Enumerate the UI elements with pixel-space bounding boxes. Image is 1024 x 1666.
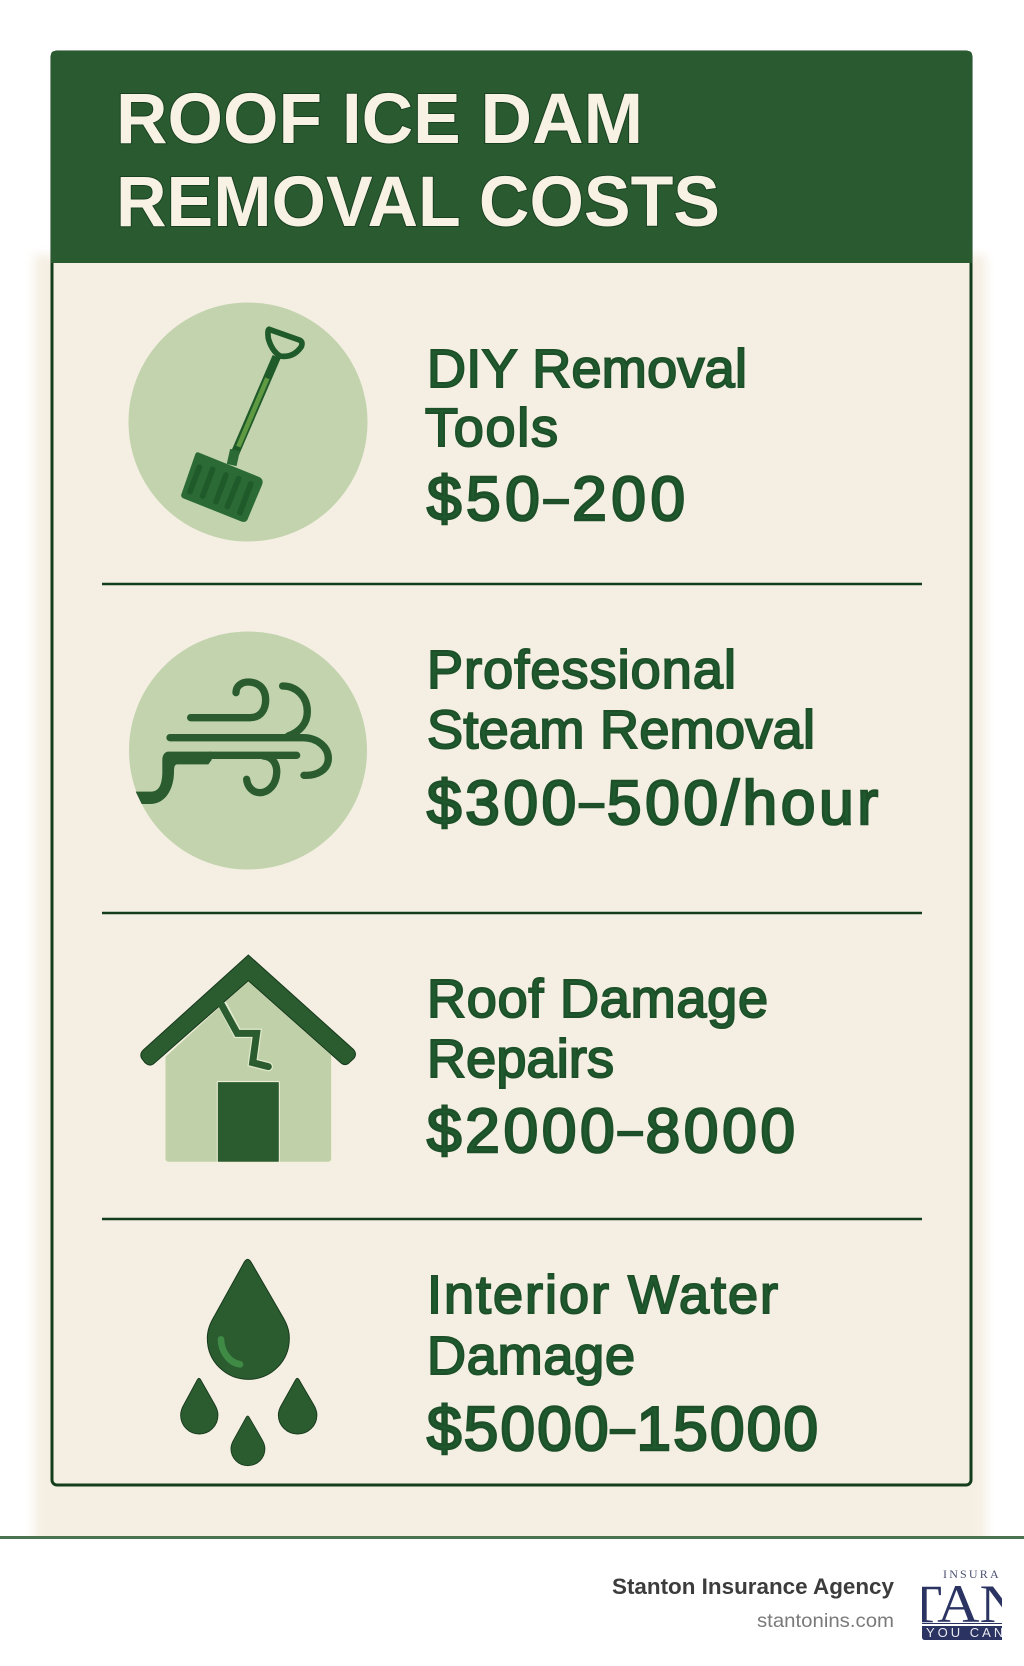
- text: professional steam removal: Steam Removal: [427, 700, 815, 760]
- text: DIY removal tools: Tools: [425, 398, 558, 458]
- text: roof damage repairs: $2000: [427, 1097, 615, 1166]
- text: interior water damage: Interior Water: [427, 1265, 778, 1325]
- icon: house with cracked roof: [141, 955, 355, 1162]
- text: roof damage repairs: –: [618, 1106, 642, 1153]
- text: DIY removal tools: [425, 339, 747, 534]
- text: interior water damage: Damage: [427, 1326, 635, 1386]
- text: professional steam removal: [427, 640, 878, 838]
- text: interior water damage: –: [611, 1404, 635, 1451]
- title: [116, 80, 720, 242]
- icon: water drops: [181, 1259, 317, 1466]
- text: DIY removal tools: –: [544, 474, 568, 521]
- title: REMOVAL COSTS: [116, 163, 720, 242]
- footer: agency name and website: [612, 1574, 895, 1632]
- footer: agency name and website: Stanton Insurance Agency: [612, 1574, 895, 1599]
- icon: snow shovel in circle: [128, 302, 368, 542]
- text: roof damage repairs: 8000: [646, 1097, 795, 1166]
- footer rule: [0, 1536, 1024, 1539]
- icon: steam in circle: [129, 632, 367, 870]
- text: DIY removal tools: 200: [572, 465, 685, 534]
- text: professional steam removal: 500/hour: [607, 769, 878, 838]
- text: professional steam removal: $300: [427, 769, 576, 838]
- title: ROOF ICE DAM: [116, 80, 643, 159]
- text: interior water damage: $5000: [427, 1395, 609, 1464]
- text: professional steam removal: –: [580, 778, 604, 825]
- text: roof damage repairs: Repairs: [427, 1029, 614, 1089]
- logo: cropped agency mark: YOU CAN: [926, 1625, 1006, 1640]
- text: roof damage repairs: [427, 969, 795, 1166]
- text: professional steam removal: Professional: [427, 640, 736, 700]
- logo: cropped agency mark: TAN: [906, 1574, 1022, 1634]
- text: interior water damage: [427, 1265, 818, 1464]
- header band: [51, 51, 972, 263]
- text: interior water damage: 15000: [636, 1395, 818, 1464]
- panel: cost card: [51, 51, 972, 1485]
- text: DIY removal tools: DIY Removal: [427, 339, 747, 399]
- footer: agency name and website: stantonins.com: [757, 1610, 894, 1632]
- text: roof damage repairs: Roof Damage: [427, 969, 768, 1029]
- text: DIY removal tools: $50: [427, 465, 540, 534]
- logo: cropped agency mark: INSURA: [943, 1567, 1001, 1581]
